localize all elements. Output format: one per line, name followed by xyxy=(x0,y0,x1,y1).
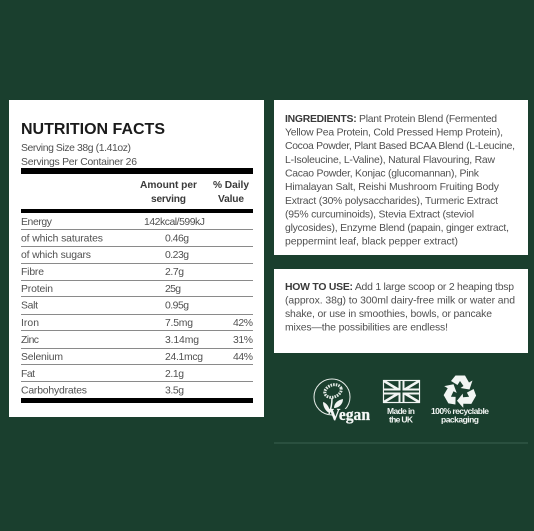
panel: how to use: shake, or use in smoothies, bowls, or pancake xyxy=(285,309,492,320)
panel: ingredients: L-Isoleucine, L-Valine), Natural Flavouring, Raw xyxy=(285,155,495,166)
table header: % Daily xyxy=(213,180,249,191)
table rows: 44% xyxy=(233,352,253,363)
icon: vegan logo xyxy=(314,379,372,425)
serving info: Servings Per Container 26 xyxy=(21,157,137,168)
recyclable packaging label: packaging xyxy=(441,414,479,424)
table rows: 2.7g xyxy=(165,267,184,278)
table rows: 31% xyxy=(233,335,253,346)
panel: ingredients: Extract (30% polysaccharides), Turmeric Extract xyxy=(285,196,498,207)
table rows: Fibre xyxy=(21,267,44,278)
table rows: 0.46g xyxy=(165,234,189,244)
panel: ingredients: Yellow Pea Protein, Cold Pressed Hemp Protein), xyxy=(285,128,503,138)
table rows: 42% xyxy=(233,318,253,329)
table rows: Selenium xyxy=(21,352,63,363)
panel: nutrition facts xyxy=(9,100,264,417)
panel: ingredients: peppermint leaf, black pepper extract) xyxy=(285,236,458,248)
panel: how to use: mixes—the possibilities are endless! xyxy=(285,322,448,334)
serving info: Serving Size 38g (1.41oz) xyxy=(21,143,131,154)
panel: ingredients: glycosides), Enzyme Blend (papain, ginger extract, xyxy=(285,223,509,234)
table rows: Salt xyxy=(21,300,38,312)
table rows: Protein xyxy=(21,284,53,295)
table rows: 24.1mcg xyxy=(165,352,203,363)
made in the UK label: the UK xyxy=(389,414,414,424)
table rows: 0.23g xyxy=(165,250,189,261)
table rows: 142kcal/599kJ xyxy=(144,217,205,228)
table rows: of which saturates xyxy=(21,234,103,244)
icon: UK flag xyxy=(384,380,420,402)
icon: vegan logo: Vegan xyxy=(329,405,370,424)
table rows: Fat xyxy=(21,369,35,380)
table header: Value xyxy=(218,194,244,205)
table rows: 2.1g xyxy=(165,369,184,380)
table rows: Carbohydrates xyxy=(21,386,87,396)
panel: ingredients: Cocoa Powder, Plant Based BCAA Blend (L-Leucine, xyxy=(285,141,515,152)
table rows: 0.95g xyxy=(165,300,189,312)
table header xyxy=(21,168,253,213)
table rows: 7.5mg xyxy=(165,318,193,329)
table rows: Zinc xyxy=(21,335,39,346)
table rows: of which sugars xyxy=(21,250,91,261)
recyclable packaging label: 100% recyclable xyxy=(431,406,489,416)
panel: ingredients: Himalayan Salt, Reishi Mushroom Fruiting Body xyxy=(285,182,500,193)
made in the UK label: Made in xyxy=(387,406,415,416)
table rows: 3.5g xyxy=(165,386,184,396)
icon: recycle symbol xyxy=(440,376,478,410)
panel: how to use: HOW TO USE: Add 1 large scoop or 2 heaping tbsp xyxy=(285,282,514,293)
panel: ingredients: (95% curcuminoids), Stevia Extract (steviol xyxy=(285,210,474,220)
table rows xyxy=(21,217,253,396)
panel: how to use: (approx. 38g) to 300ml dairy-free milk or water and xyxy=(285,296,515,306)
table header: Amount per xyxy=(140,180,197,191)
made in the UK label xyxy=(387,406,415,424)
panel: how to use xyxy=(274,269,528,353)
table rows: Iron xyxy=(21,318,39,329)
table rows: 3.14mg xyxy=(165,335,199,346)
table rows: 25g xyxy=(165,284,181,295)
panel: ingredients: INGREDIENTS: Plant Protein Blend (Fermented xyxy=(285,114,497,125)
recyclable packaging label xyxy=(431,406,489,424)
serving info xyxy=(21,143,137,168)
panel: ingredients xyxy=(274,100,528,255)
table rows: Energy xyxy=(21,217,53,228)
table header: serving xyxy=(151,194,186,205)
title: NUTRITION FACTS xyxy=(21,121,165,138)
panel: ingredients: Cacao Powder, Konjac (glucomannan), Pink xyxy=(285,168,480,180)
